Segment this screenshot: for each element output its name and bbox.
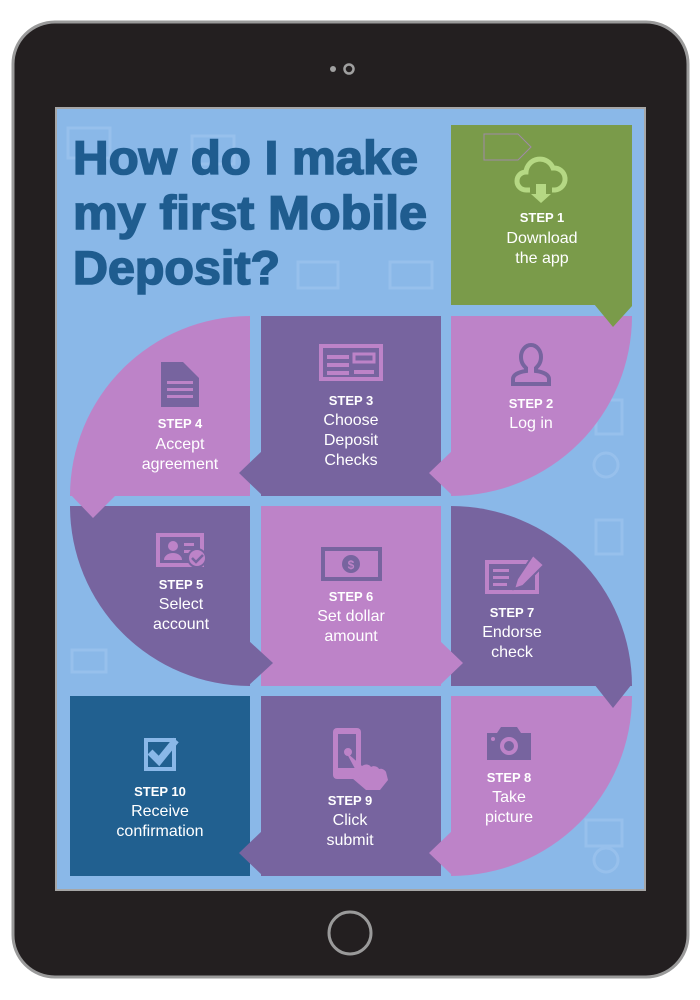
- title: [73, 131, 427, 294]
- title: Deposit?: [73, 241, 280, 294]
- panel: step 1: the app: [515, 250, 569, 267]
- panel: step 7: STEP 7: [490, 605, 534, 620]
- title: my first Mobile: [73, 186, 427, 239]
- icon: check: [321, 346, 381, 379]
- panel: step 9: STEP 9: [328, 793, 372, 808]
- icon: document: [161, 362, 199, 407]
- panel: step 10: Receive: [131, 803, 189, 820]
- icon: dollar bill: $: [348, 558, 355, 572]
- panel: step 6: Set dollar: [317, 608, 385, 625]
- icon: endorse check: [487, 555, 544, 592]
- panel: step 4: Accept: [156, 436, 205, 453]
- panel: step 2: [451, 316, 632, 496]
- panel: step 7: [451, 506, 632, 686]
- panel: step 5: account: [153, 616, 210, 633]
- panel: step 3: [261, 316, 441, 496]
- panel: step 8: STEP 8: [487, 770, 531, 785]
- panel: step 9: [261, 696, 441, 876]
- panel: step 10: confirmation: [116, 823, 204, 840]
- panel: step 8: picture: [485, 809, 533, 826]
- panel: step 1: [451, 125, 632, 305]
- icon: dollar bill: [323, 549, 380, 579]
- panel: step 1: STEP 1: [520, 210, 564, 225]
- panel: step 6: STEP 6: [329, 589, 373, 604]
- icon: user: [513, 345, 549, 384]
- panel: step 9: Click: [333, 812, 368, 829]
- panel: step 5: [70, 506, 250, 686]
- panel: step 2: STEP 2: [509, 396, 553, 411]
- title: How do I make: [73, 131, 418, 184]
- icon: cloud download: [517, 159, 565, 190]
- icon: account card: [158, 535, 206, 567]
- screen: [56, 108, 645, 890]
- icon: tag: [484, 134, 531, 160]
- panel: step 6: amount: [324, 628, 378, 645]
- panel: step 5: Select: [159, 596, 204, 613]
- panel: step 8: Take: [492, 789, 526, 806]
- icon: checkbox: [146, 740, 176, 769]
- panel: step 8: [451, 696, 632, 876]
- panel: step 3: STEP 3: [329, 393, 373, 408]
- panel: step 4: [70, 316, 250, 496]
- panel: step 10: STEP 10: [134, 784, 186, 799]
- panel: step 3: Checks: [324, 452, 378, 469]
- panel: step 7: check: [491, 644, 534, 661]
- panel: step 4: agreement: [142, 456, 219, 473]
- panel: step 1: Download: [506, 230, 578, 247]
- panel: step 9: submit: [326, 832, 374, 849]
- panel: step 6: [261, 506, 441, 686]
- panel: step 3: Choose: [323, 412, 379, 429]
- icon: phone tap: [333, 728, 388, 790]
- arrows connecting steps: [70, 304, 632, 876]
- panel: step 2: Log in: [509, 415, 553, 432]
- panel: step 4: STEP 4: [158, 416, 203, 431]
- panel: step 7: Endorse: [482, 624, 542, 641]
- icon: camera: [487, 727, 531, 760]
- panel: step 10: [70, 696, 250, 876]
- panel: step 5: STEP 5: [159, 577, 203, 592]
- panel: step 3: Deposit: [324, 432, 379, 449]
